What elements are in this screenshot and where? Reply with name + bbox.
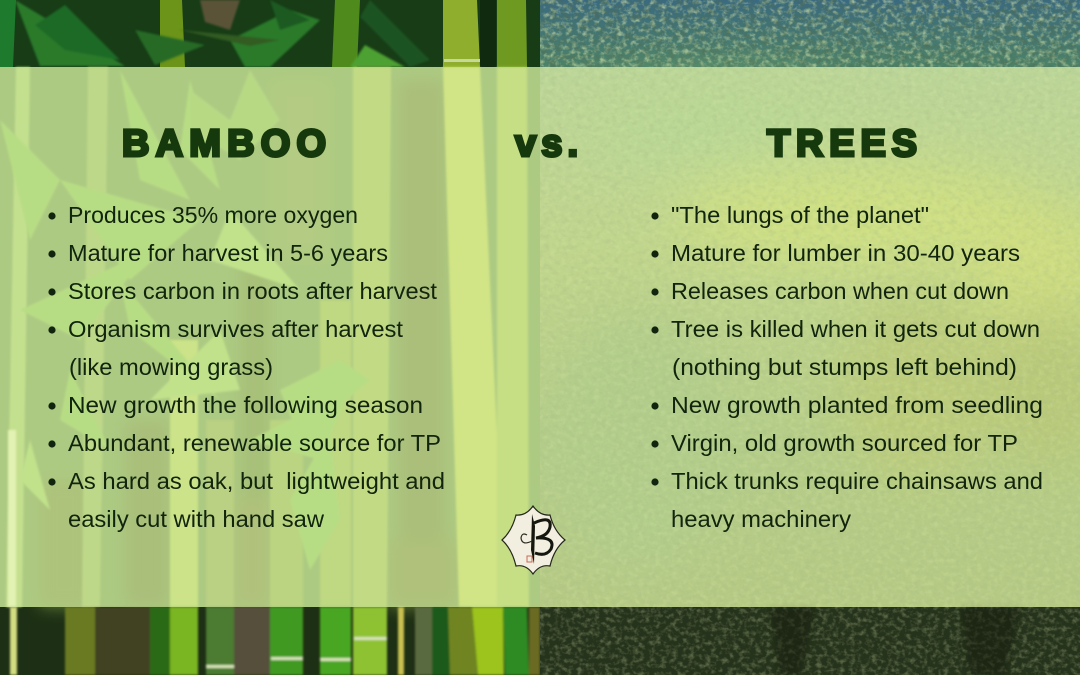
list: tree facts: (nothing but stumps left behind) [672,354,1017,380]
list: bamboo facts: Abundant, renewable source for TP [68,430,441,456]
list: bamboo facts: Organism survives after harvest [68,316,404,342]
list: tree facts: Mature for lumber in 30-40 years [671,240,1020,266]
panel stalks [6,67,529,607]
list: bamboo facts: easily cut with hand saw [68,506,324,532]
panel: translucent overlay [0,67,1080,607]
list: bamboo facts: New growth the following season [68,392,423,418]
bottom strip stalks [10,607,540,675]
list: tree facts: Thick trunks require chainsaws and [671,468,1043,494]
heading: BAMBOO: BAMBOO [122,123,326,165]
list: bamboo facts: Stores carbon in roots after harvest [68,278,438,304]
list: bamboo facts: (like mowing grass) [69,354,273,380]
heading: TREES: TREES [767,123,917,165]
list: tree facts [651,202,1043,532]
list: tree facts: Virgin, old growth sourced for TP [671,430,1018,456]
icon: lotus B logo [502,506,565,574]
list: bamboo facts: As hard as oak, but lightweight and [68,468,445,494]
list: tree facts: New growth planted from seedling [671,392,1043,418]
list: bamboo facts [48,202,445,532]
list: tree facts: Releases carbon when cut down [671,278,1009,304]
top strip leaves [15,0,430,67]
panel shade bands [40,80,458,607]
bamboo leaves [0,70,370,570]
photo: bamboo grove [0,0,540,675]
list: tree facts: heavy machinery [671,506,852,532]
list: tree facts: Tree is killed when it gets cut down [671,316,1040,342]
list: bamboo facts: Produces 35% more oxygen [68,202,358,228]
list: tree facts: "The lungs of the planet" [671,202,929,228]
heading: vs.: vs. [515,123,578,165]
top strip stalks [160,0,185,67]
list: bamboo facts: Mature for harvest in 5-6 years [68,240,388,266]
photo: conifer forest [540,0,1080,675]
